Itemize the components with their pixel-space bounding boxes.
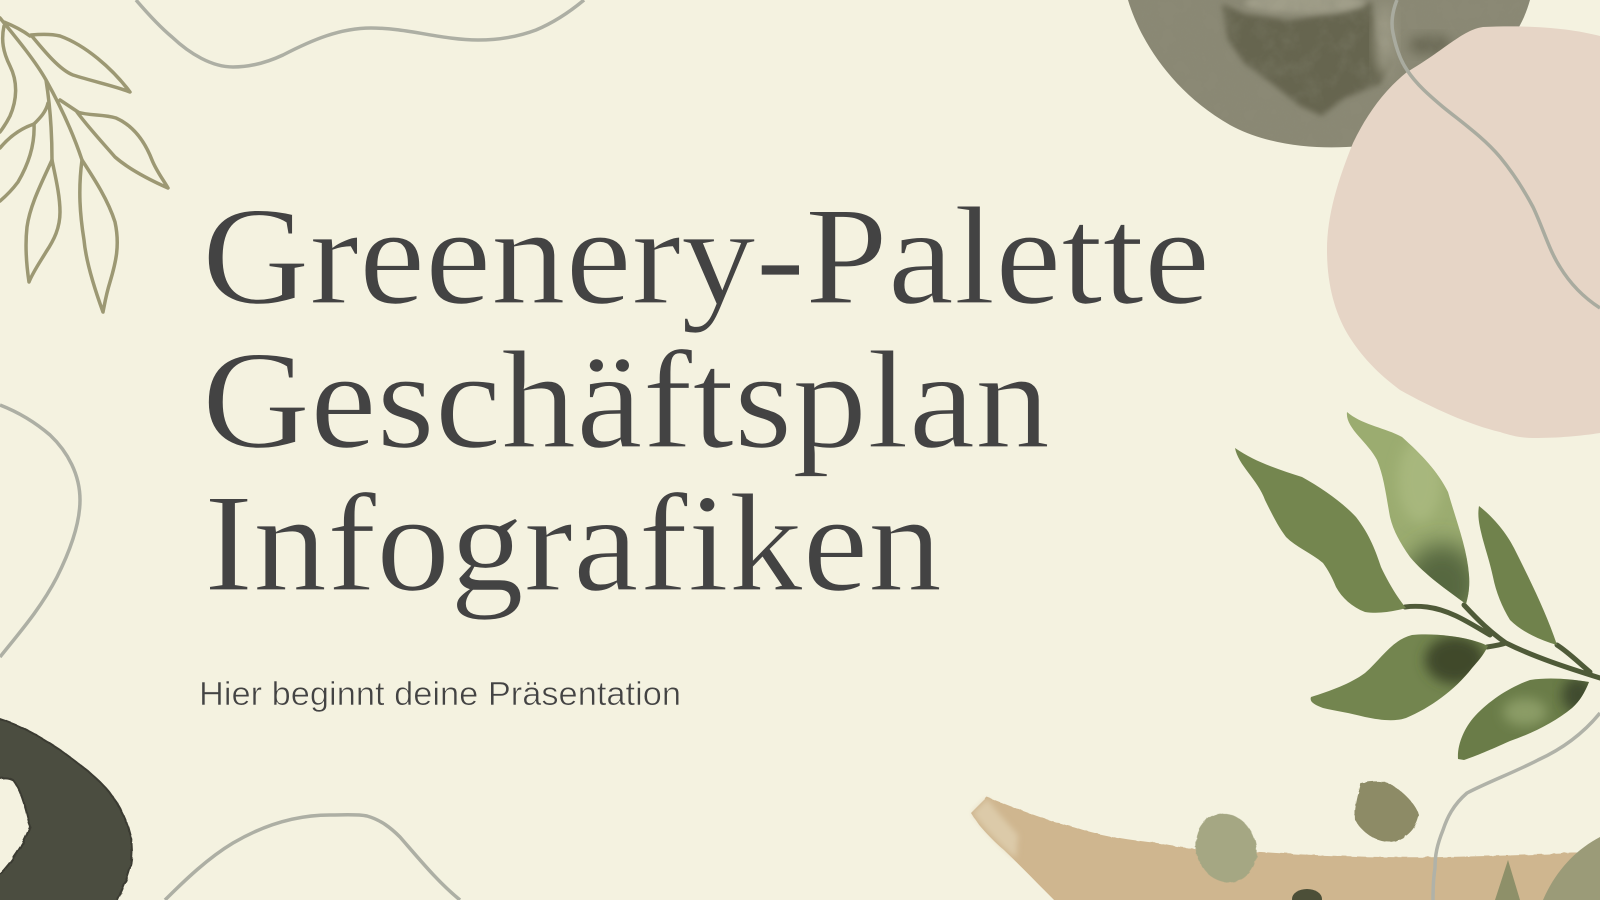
leaf outline top — [31, 34, 130, 92]
branch stems — [1405, 605, 1600, 678]
subtitle: Hier beginnt deine Präsentation — [199, 675, 681, 712]
decoration: gray line top right — [1392, 0, 1600, 308]
decoration: dark watercolor circle — [1120, 0, 1540, 155]
decoration: watercolor leaf branch — [1235, 405, 1600, 765]
decoration: pink watercolor circle — [1327, 26, 1600, 438]
title line 2: Geschäftsplan — [202, 323, 1050, 478]
decoration: small dark dot — [1292, 889, 1322, 900]
decoration: small green triangle leaf — [1495, 860, 1520, 900]
leaf outline long — [80, 160, 117, 312]
decoration: dark watercolor blob — [0, 716, 132, 900]
title — [202, 179, 1210, 621]
leaf: lower middle — [1310, 634, 1488, 720]
decoration: gray line top — [136, 0, 584, 67]
leaf: upper left — [1235, 448, 1406, 613]
leaf outline left edge — [0, 124, 34, 201]
stems — [0, 18, 82, 160]
leaf: upper center — [1346, 412, 1470, 604]
leaf: lower right — [1458, 678, 1589, 760]
decoration: gray line left — [0, 405, 80, 657]
decoration: gray line bottom — [165, 815, 460, 900]
leaf outline middle right — [77, 112, 168, 188]
decoration: corner leaf — [1543, 837, 1600, 900]
leaf outline short — [26, 160, 60, 282]
leaf: right narrow — [1478, 506, 1557, 645]
title line 1: Greenery-Palette — [202, 179, 1210, 334]
decoration: gray line bottom right — [1433, 713, 1600, 900]
leaf outline far left — [0, 26, 16, 132]
title line 3: Infografiken — [204, 466, 942, 621]
decoration: olive dot — [1355, 781, 1419, 842]
decoration: outlined leaf branch — [0, 18, 168, 312]
decoration: tan brush stroke — [971, 797, 1600, 900]
decoration: light green dot — [1186, 805, 1266, 891]
